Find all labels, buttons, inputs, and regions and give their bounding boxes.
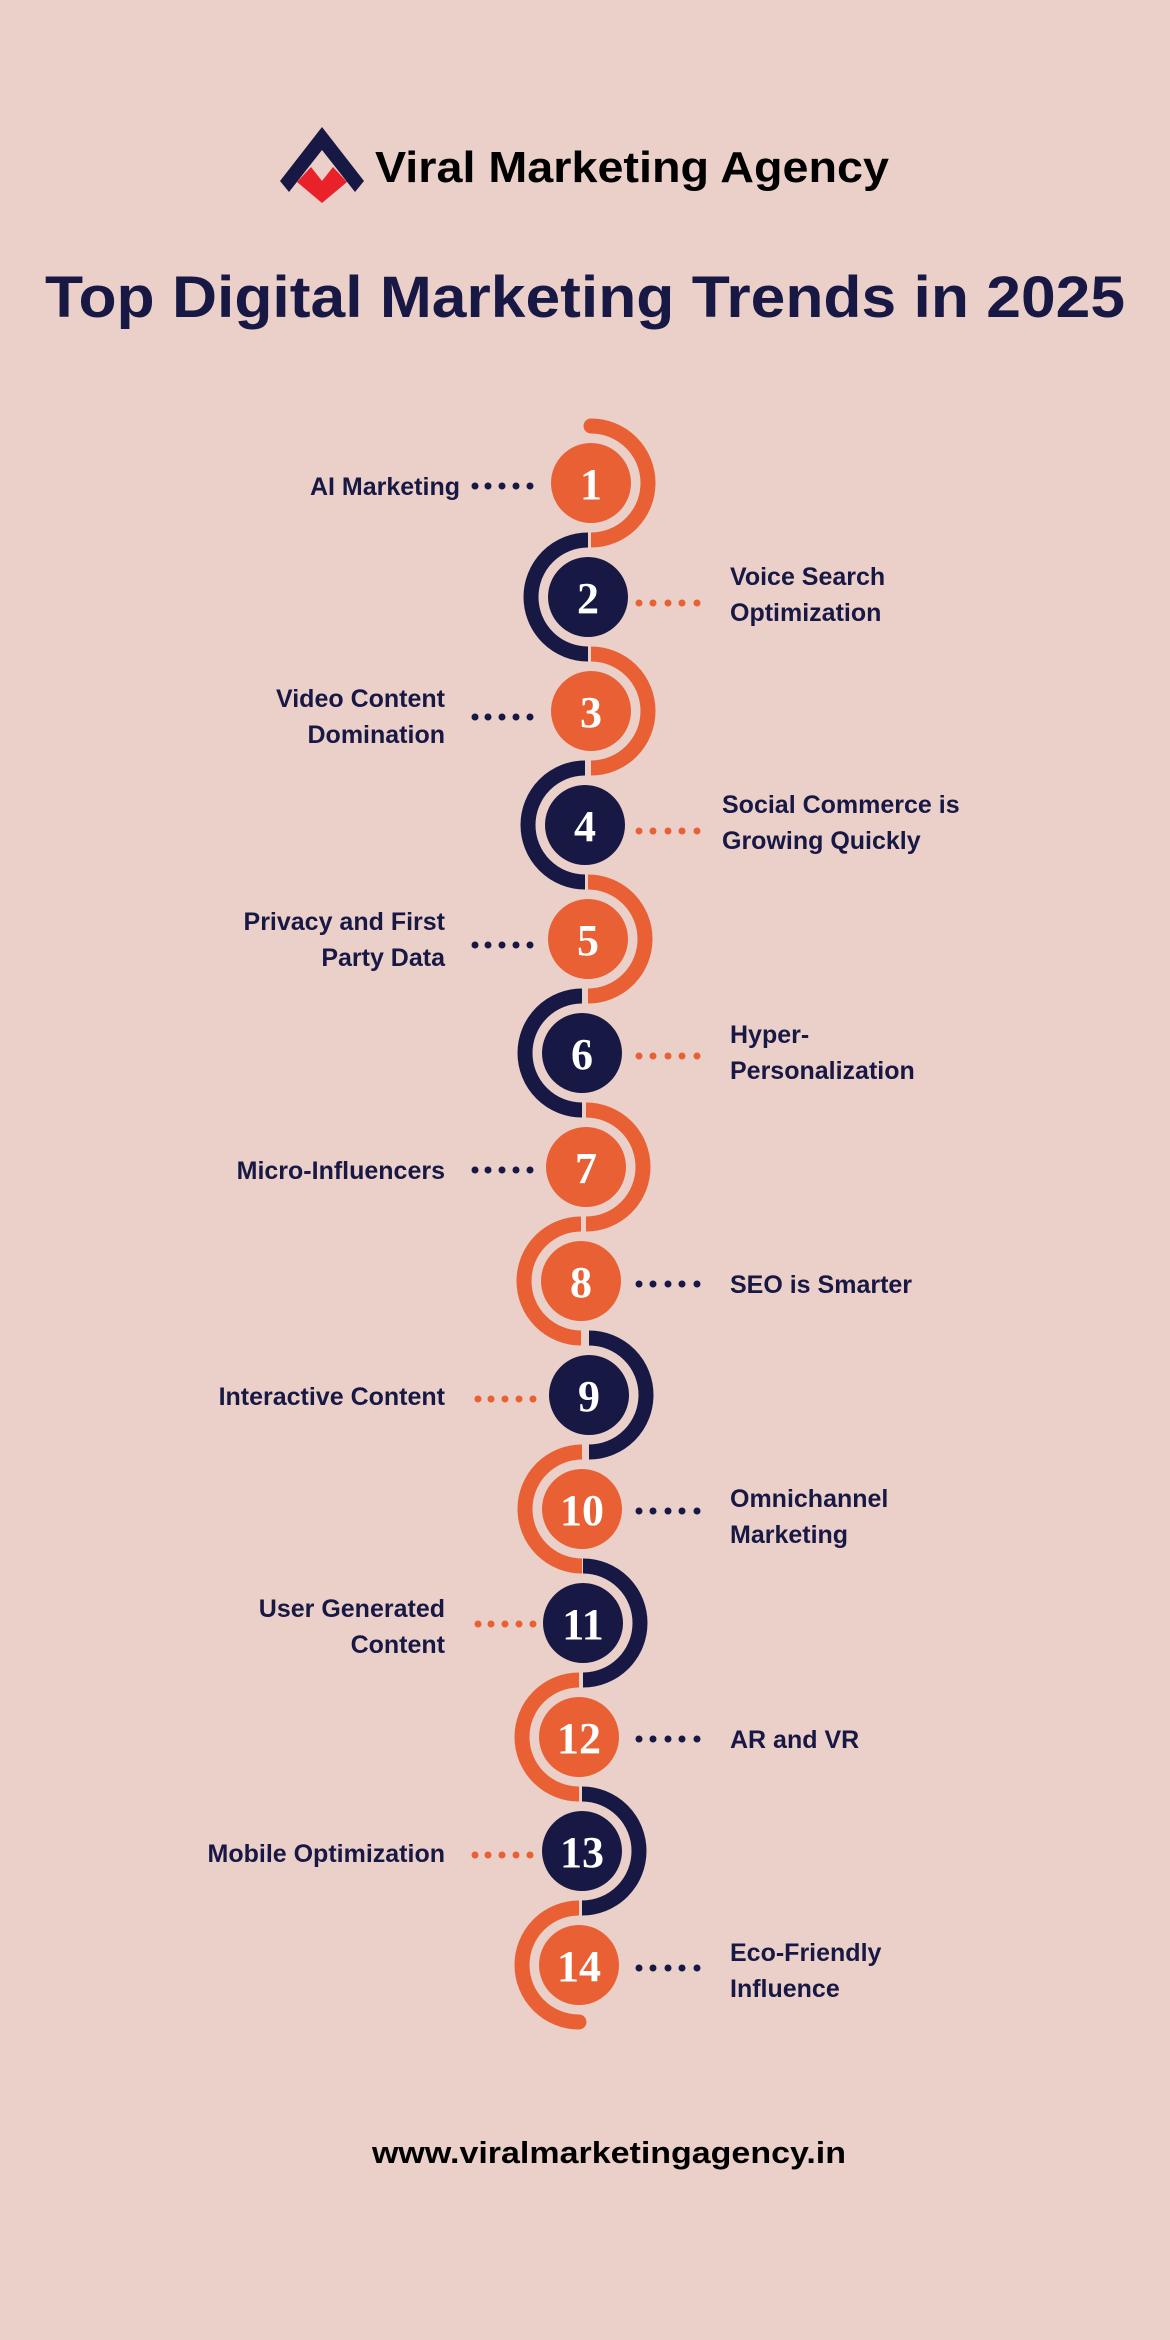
item 3: 3 [580,688,602,737]
item 2: 2 [577,574,599,623]
item 2: Voice Search [730,563,885,591]
item 10 [542,1469,888,1549]
item 6: Hyper- [730,1021,809,1049]
item 9: Interactive Content [219,1383,446,1411]
item 9: 9 [578,1372,600,1421]
item 1: 1 [580,460,602,509]
item 7: 7 [575,1144,597,1193]
item 4: Social Commerce is [722,791,960,819]
logo [280,127,890,203]
icon: logo diamond [280,127,364,203]
item 9 [219,1355,629,1435]
item 11: 11 [562,1600,604,1649]
item 12 [539,1697,859,1777]
website url: www.viralmarketingagency.in [371,2135,846,2170]
item 10: 10 [560,1486,604,1535]
logo text: Viral Marketing Agency [375,143,890,192]
item 5: Party Data [321,944,446,972]
item 14 [539,1925,882,2005]
title: Top Digital Marketing Trends in 2025 [45,265,1125,330]
item 7 [237,1127,626,1207]
item 4: 4 [574,802,596,851]
item 12: 12 [557,1714,601,1763]
item 1: AI Marketing [310,473,460,501]
item 14: 14 [557,1942,601,1991]
item 5 [244,899,628,979]
item 11: Content [351,1631,446,1659]
item 4 [545,785,960,865]
item 10: Marketing [730,1521,848,1549]
item 11 [259,1583,623,1663]
item 2 [548,557,885,637]
item 8 [541,1241,912,1321]
item 6: Personalization [730,1057,915,1085]
item 8: SEO is Smarter [730,1271,912,1299]
timeline [208,418,960,2030]
item 4: Growing Quickly [722,827,921,855]
item 11: User Generated [259,1595,445,1623]
item 6: 6 [571,1030,593,1079]
item 3: Domination [308,721,445,749]
item 3 [276,671,631,751]
arcs [522,418,648,2030]
item 1 [310,443,631,523]
item 13 [208,1811,622,1891]
item 14: Influence [730,1975,840,2003]
item 5: 5 [577,916,599,965]
item 14: Eco-Friendly [730,1939,882,1967]
item 7: Micro-Influencers [237,1157,445,1185]
item 10: Omnichannel [730,1485,888,1513]
item 12: AR and VR [730,1726,859,1754]
item 8: 8 [570,1258,592,1307]
item 3: Video Content [276,685,446,713]
item 6 [542,1013,915,1093]
item 13: 13 [560,1828,604,1877]
item 2: Optimization [730,599,881,627]
item 13: Mobile Optimization [208,1840,445,1868]
item 5: Privacy and First [244,908,446,936]
